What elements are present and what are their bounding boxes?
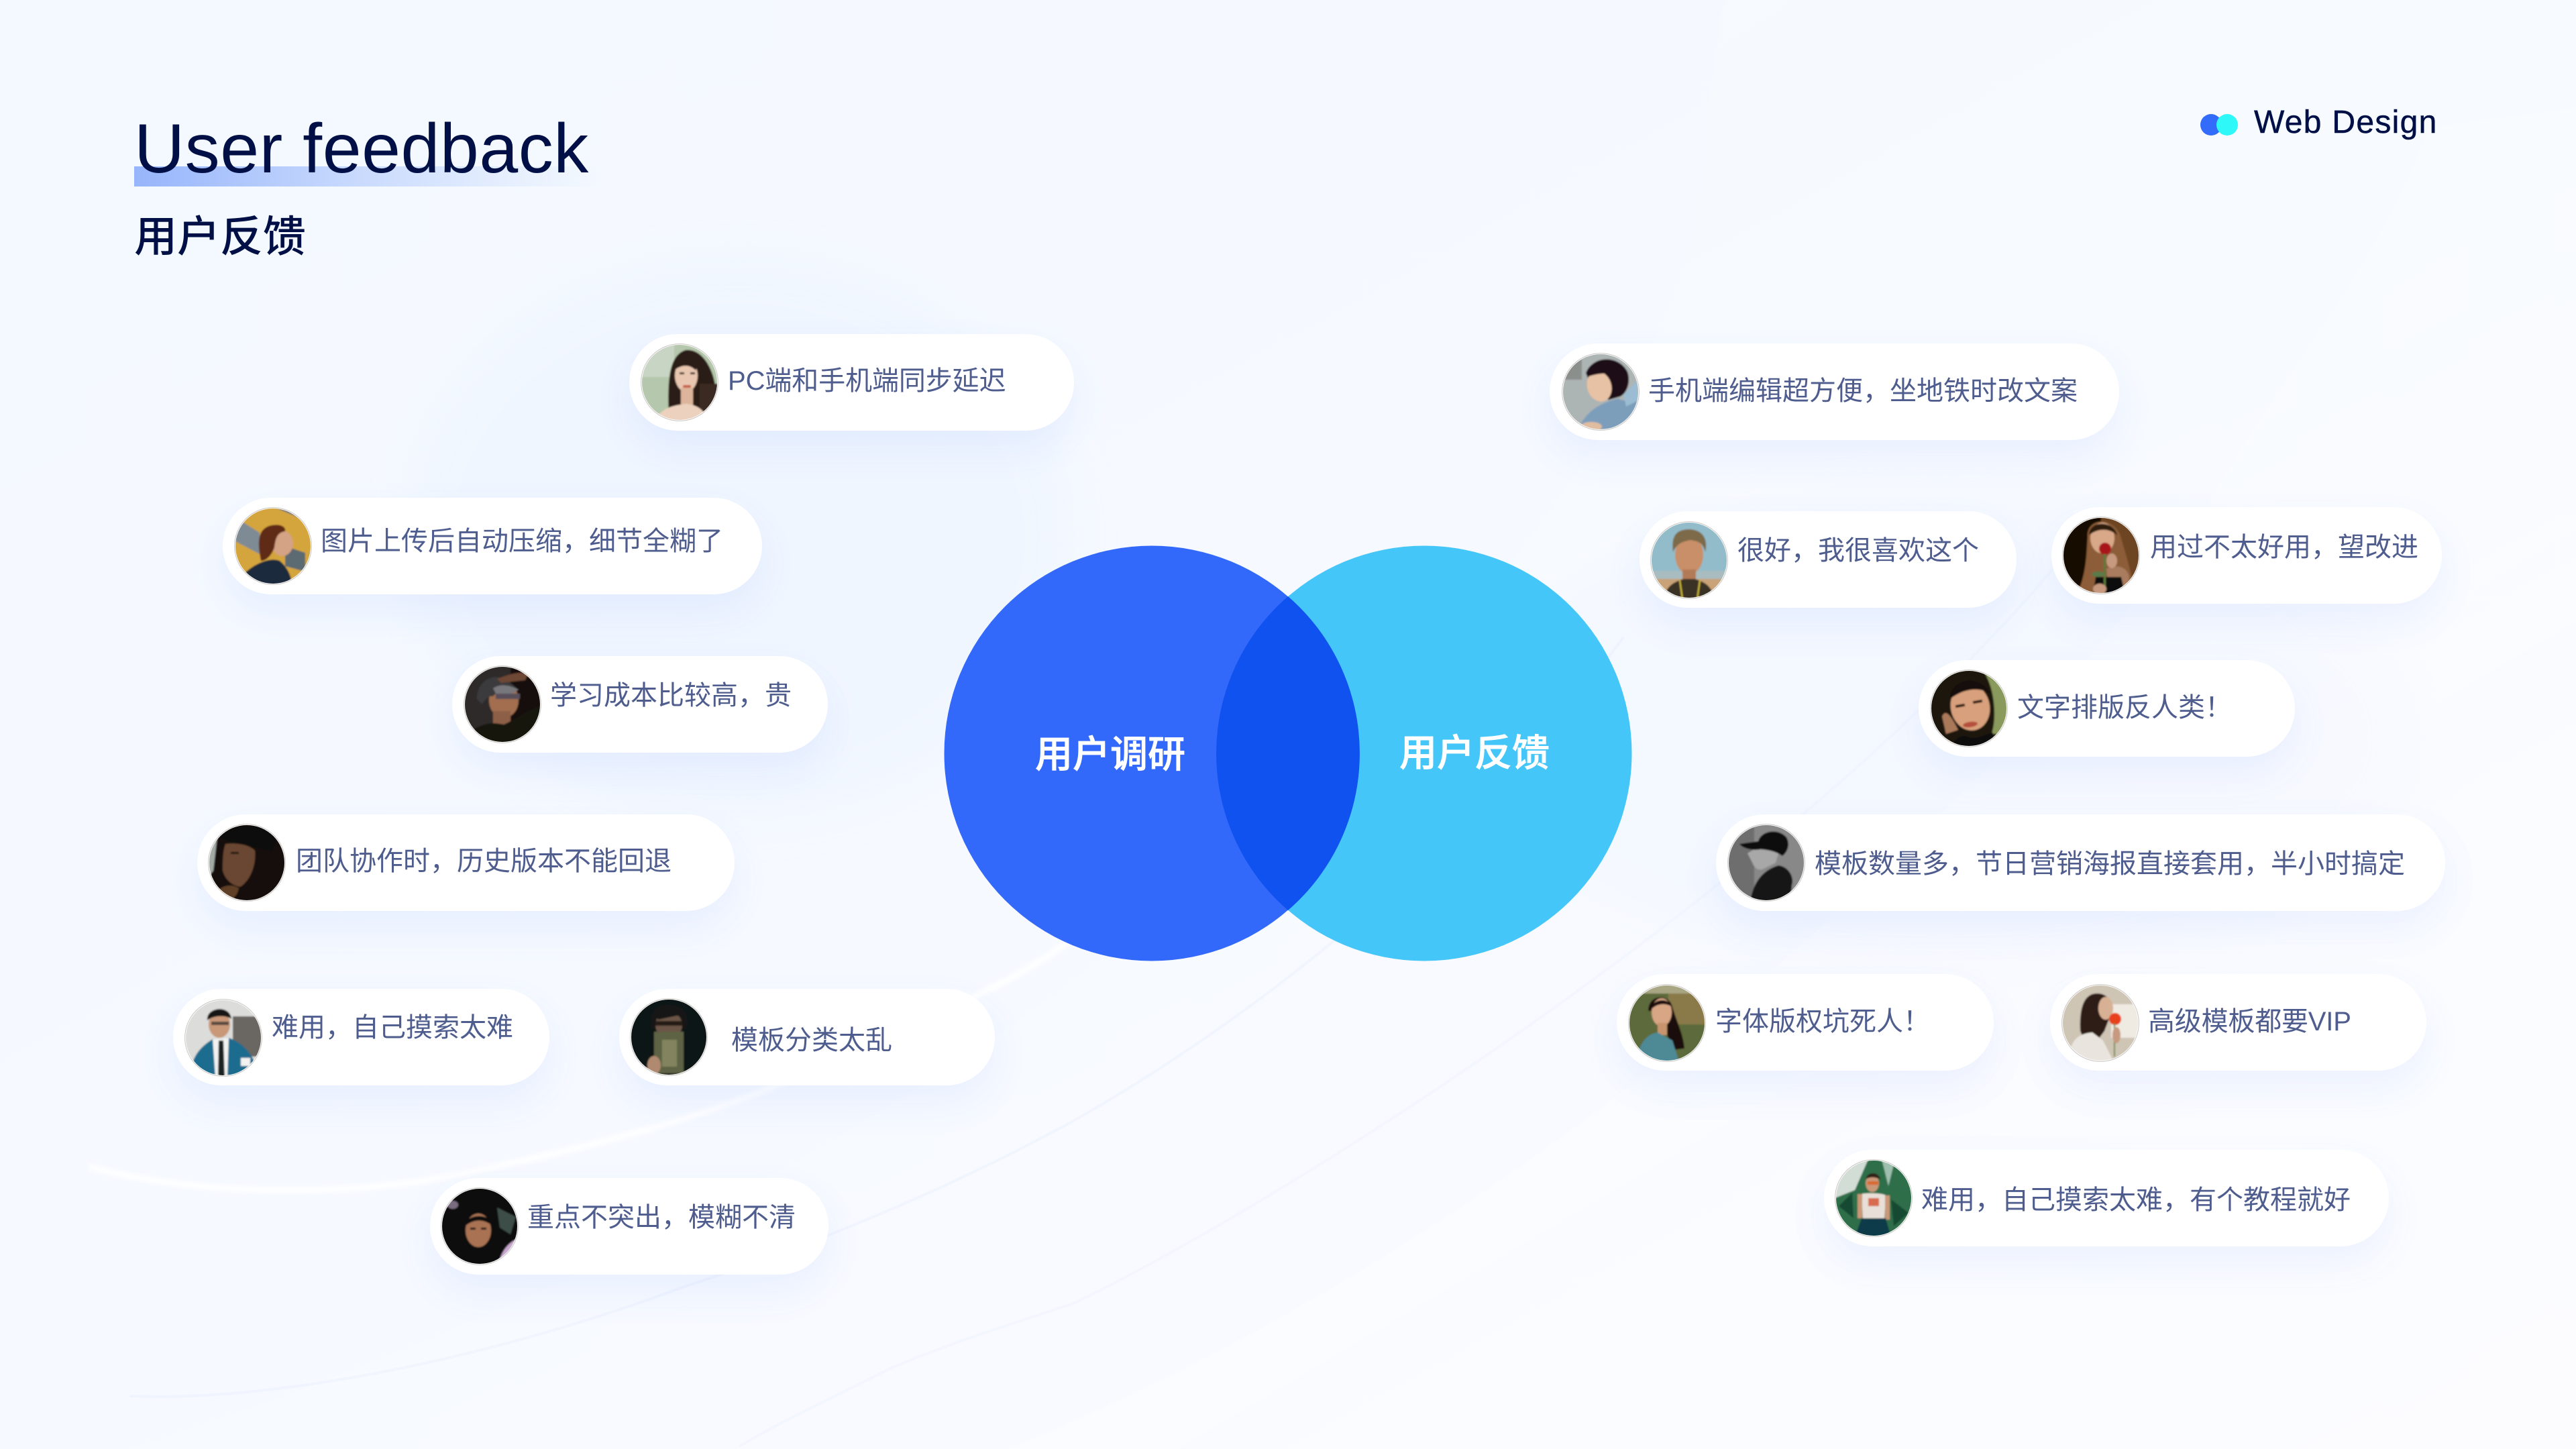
subtitle: 用户反馈 [134,213,306,261]
comment text: 模板分类太乱 [731,1026,892,1055]
avatar: woman with curly hair [1930,669,2008,747]
feedback pill: team collaboration [197,814,735,911]
avatar: grayscale man in cap and hoodie [1727,824,1805,902]
feedback pill: typography complaint [1919,660,2295,757]
comment text: 难用，自己摸索太难 [272,1013,513,1042]
feedback pill: hard to use [173,989,549,1085]
feedback pill: premium templates [2050,974,2426,1071]
avatar: woman in sunglasses among green plants [1835,1159,1913,1237]
feedback pill: mobile editing [1550,343,2119,440]
avatar: woman with short hair in denim shirt [1562,353,1640,431]
feedback pill: image compression [223,498,762,594]
comment text: 学习成本比较高，贵 [550,681,792,710]
feedback pill: not great, improve [2051,507,2442,604]
avatar: man in teal suit [184,999,262,1077]
feedback pill: PC sync delay [629,334,1074,431]
avatar: man in cap in shadow [208,824,286,902]
avatar: man shading eyes with hand [464,665,541,743]
feedback pill: really like it [1640,511,2017,608]
title: User feedback with highlight bar: User feedback [134,110,589,188]
feedback pill: no clear emphasis [430,1178,828,1275]
comment text: 高级模板都要VIP [2148,1007,2351,1036]
avatar: person among dark leaves [441,1187,519,1265]
feedback pill: many templates [1716,814,2445,911]
comment text: 难用，自己摸索太难，有个教程就好 [1921,1185,2351,1215]
avatar: woman with dark hair [641,343,718,421]
feedback pill: font licensing [1617,974,1994,1071]
comment text: 文字排版反人类！ [2017,693,2232,722]
comment text: 重点不突出，模糊不清 [527,1203,796,1232]
comment text: PC端和手机端同步延迟 [728,366,1006,396]
comment text: 模板数量多，节日营销海报直接套用，半小时搞定 [1815,849,2405,879]
avatar: woman with orange flower [2061,984,2139,1062]
avatar: man at the beach [1650,521,1728,599]
comment text: 团队协作时，历史版本不能回退 [296,847,672,876]
avatar: smiling woman in teal top [1628,984,1706,1062]
comment text: 图片上传后自动压缩，细节全糊了 [321,527,723,556]
avatar: man in profile against yellow wall [234,507,312,585]
venn diagram: user research and user feedback: 用户反馈 [1399,732,1550,774]
feedback pill: tutorial request [1824,1150,2389,1246]
comment text: 很好，我很喜欢这个 [1737,536,1979,566]
brand logo: Web Design: Web Design [2254,105,2438,140]
avatar: person hiding behind a book [630,998,708,1076]
feedback pill: messy template categories [619,989,995,1085]
venn diagram: user research and user feedback [945,546,1631,961]
comment text: 字体版权坑死人！ [1715,1007,1930,1036]
comment text: 用过不太好用，望改进 [2150,533,2418,562]
avatar: woman with a red rose [2062,517,2140,594]
feedback pill: learning cost [452,656,828,753]
comment text: 手机端编辑超方便，坐地铁时改文案 [1648,376,2078,406]
venn diagram: user research and user feedback: 用户调研 [1035,733,1185,775]
